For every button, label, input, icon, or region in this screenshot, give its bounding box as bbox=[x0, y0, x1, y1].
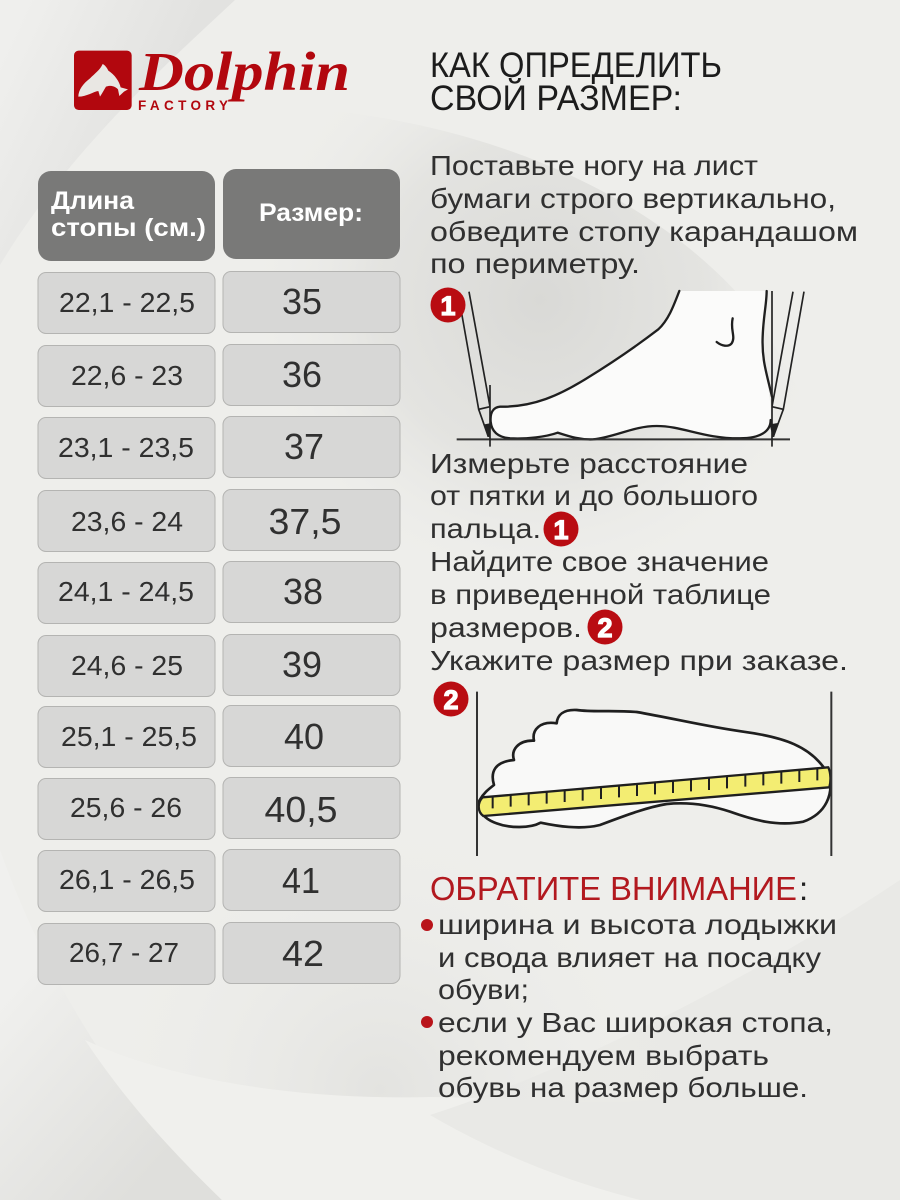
instructions: measure bbox=[430, 448, 848, 676]
left pencil bbox=[462, 292, 491, 447]
title bbox=[430, 46, 722, 118]
heel outline bbox=[763, 291, 772, 397]
title: СВОЙ РАЗМЕР: bbox=[430, 78, 682, 118]
badge 1 inline bbox=[544, 512, 578, 546]
bullet list: обуви; bbox=[438, 974, 529, 1005]
sub-brand: FACTORY bbox=[138, 98, 228, 113]
badge 2 inline bbox=[588, 610, 622, 644]
bullet list: и свода влияет на посадку bbox=[438, 942, 821, 973]
row 39 bbox=[38, 634, 400, 696]
bullet list: если у Вас широкая стопа, bbox=[438, 1007, 833, 1038]
right pencil bbox=[771, 291, 804, 447]
row 40,5: 25,6 - 26 bbox=[70, 792, 182, 823]
row 41: 26,1 - 26,5 bbox=[59, 864, 195, 895]
attention heading: : bbox=[799, 870, 808, 907]
right limit line bbox=[828, 692, 834, 856]
wordmark: Dolphin bbox=[138, 41, 350, 102]
ground line bbox=[457, 436, 790, 442]
badge 1: 1 bbox=[440, 291, 456, 321]
foot fill bbox=[491, 291, 771, 439]
instructions: measure: Найдите свое значение bbox=[430, 546, 769, 577]
instructions: place foot bbox=[430, 150, 858, 279]
header: size bbox=[223, 169, 400, 259]
badge 1 inline: 1 bbox=[553, 515, 569, 545]
size table bbox=[38, 169, 400, 984]
header: size: Размер: bbox=[259, 199, 363, 227]
row 37: 37 bbox=[284, 426, 324, 467]
row 35: 22,1 - 22,5 bbox=[59, 287, 195, 318]
instructions: place foot: обведите стопу карандашом bbox=[430, 216, 858, 247]
instructions: measure: пальца. bbox=[430, 513, 541, 544]
row 42 bbox=[38, 922, 400, 984]
bullet list: рекомендуем выбрать bbox=[438, 1040, 769, 1071]
instructions: measure: Укажите размер при заказе. bbox=[430, 645, 848, 676]
header: foot length: стопы (см.) bbox=[51, 214, 206, 242]
row 39: 39 bbox=[282, 644, 322, 685]
sole outline bbox=[479, 710, 830, 827]
bullet list bbox=[421, 909, 837, 1103]
row 37,5: 23,6 - 24 bbox=[71, 506, 183, 537]
instructions: measure: от пятки и до большого bbox=[430, 480, 758, 511]
attention heading: ОБРАТИТЕ ВНИМАНИЕ bbox=[430, 870, 797, 907]
ruler ticks bbox=[493, 769, 817, 808]
foot side diagram bbox=[457, 291, 804, 447]
badge 2: 2 bbox=[443, 685, 459, 715]
foot sole diagram with ruler bbox=[477, 692, 831, 856]
bullet list: ширина и высота лодыжки bbox=[438, 909, 837, 940]
badge 1 bbox=[430, 288, 466, 322]
row 39: 24,6 - 25 bbox=[71, 650, 183, 681]
instructions: place foot: по периметру. bbox=[430, 248, 640, 279]
row 41 bbox=[38, 850, 400, 912]
row 36: 36 bbox=[282, 354, 322, 395]
bullet dots bbox=[421, 919, 433, 1028]
title: КАК ОПРЕДЕЛИТЬ bbox=[430, 46, 722, 85]
row 38: 38 bbox=[283, 571, 323, 612]
row 37 bbox=[38, 416, 400, 478]
row 36 bbox=[38, 344, 400, 406]
icon: dolphin bbox=[74, 51, 132, 110]
ankle mark bbox=[717, 318, 733, 346]
logo: Dolphin Factory bbox=[74, 41, 350, 113]
instructions: place foot: бумаги строго вертикально, bbox=[430, 183, 836, 214]
row 40: 40 bbox=[284, 716, 324, 757]
header: foot length: Длина bbox=[51, 187, 135, 215]
row 37,5 bbox=[38, 490, 400, 552]
row 37,5: 37,5 bbox=[268, 501, 342, 542]
row 37: 23,1 - 23,5 bbox=[58, 432, 194, 463]
row 35 bbox=[38, 272, 400, 334]
instructions: measure: размеров. bbox=[430, 612, 582, 643]
bullet list: обувь на размер больше. bbox=[438, 1072, 808, 1103]
row 36: 22,6 - 23 bbox=[71, 360, 183, 391]
row 42: 42 bbox=[282, 933, 324, 974]
row 40,5 bbox=[38, 778, 400, 840]
row 40 bbox=[38, 706, 400, 768]
row 42: 26,7 - 27 bbox=[69, 937, 179, 968]
row 41: 41 bbox=[282, 860, 320, 901]
header: foot length bbox=[38, 171, 215, 261]
badge 2 bbox=[434, 682, 468, 716]
left limit line bbox=[474, 692, 480, 856]
foot outline bbox=[491, 291, 771, 439]
row 38 bbox=[38, 562, 400, 624]
ruler bbox=[479, 767, 830, 816]
row 40,5: 40,5 bbox=[264, 789, 338, 830]
row 38: 24,1 - 24,5 bbox=[58, 576, 194, 607]
row 35: 35 bbox=[282, 281, 322, 322]
instructions: measure: Измерьте расстояние bbox=[430, 448, 748, 479]
instructions: place foot: Поставьте ногу на лист bbox=[430, 150, 758, 181]
badge 2 inline: 2 bbox=[597, 613, 613, 643]
row 40: 25,1 - 25,5 bbox=[61, 721, 197, 752]
instructions: measure: в приведенной таблице bbox=[430, 579, 771, 610]
